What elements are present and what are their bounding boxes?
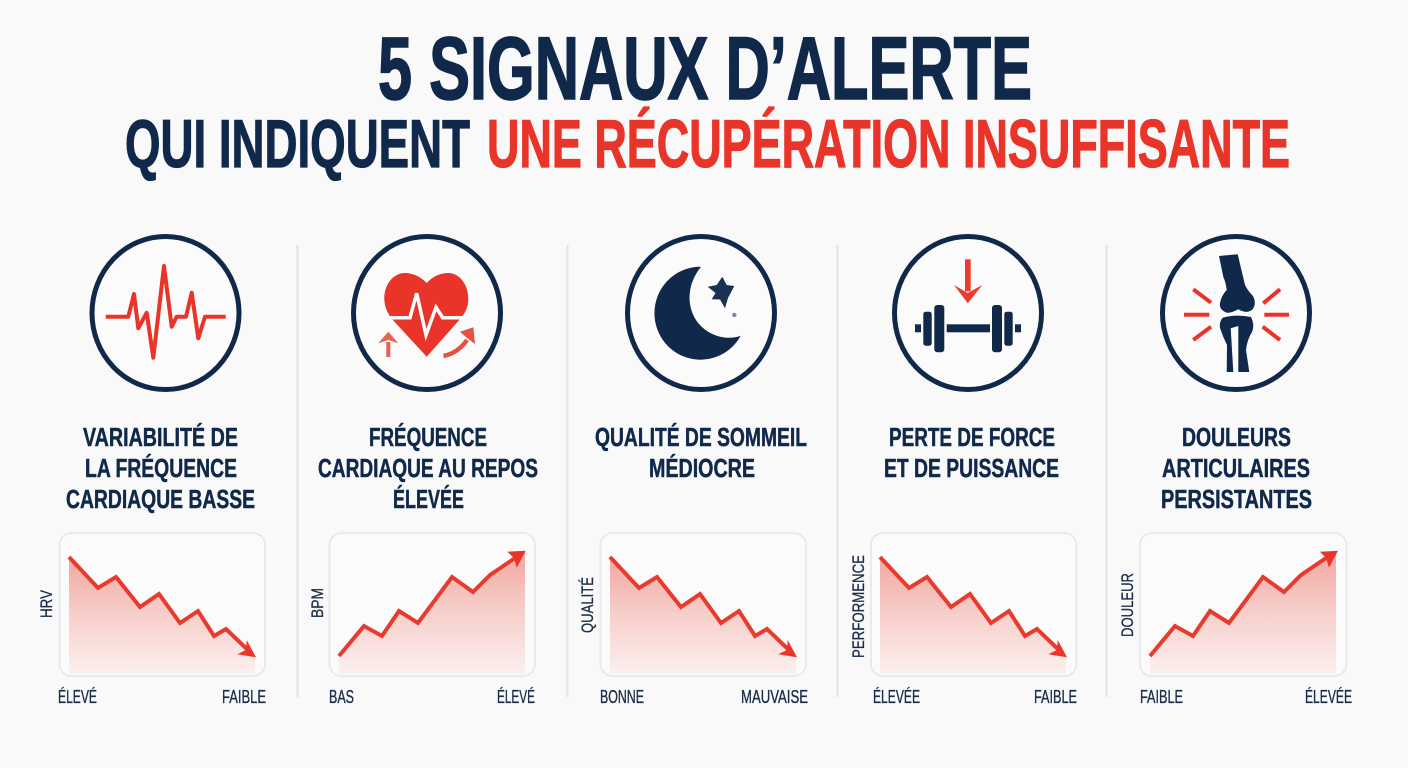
chart: HRV decline: ÉLEVÉ (58, 687, 97, 707)
chart: pain rise: ÉLEVÉE (1305, 687, 1352, 707)
chart: BPM rise: BPM (309, 588, 327, 618)
chart: performance decline: ÉLEVÉE (873, 687, 920, 707)
chart: sleep quality decline: QUALITÉ (578, 577, 597, 633)
chart: performance decline: FAIBLE (1034, 687, 1077, 707)
heading: fréquence: CARDIAQUE AU REPOS (318, 453, 538, 483)
panel: qualité de sommeil (578, 236, 808, 707)
heading: fréquence: ÉLEVÉE (393, 484, 464, 514)
heading: variabilité (66, 422, 255, 514)
chart: BPM rise: BAS (329, 687, 354, 707)
chart: pain rise: FAIBLE (1140, 687, 1183, 707)
heading: variabilité: CARDIAQUE BASSE (66, 484, 255, 514)
icon: heart with rising arrows (354, 236, 500, 390)
heading: fréquence: FRÉQUENCE (369, 422, 487, 452)
chart: sleep quality decline (578, 533, 808, 707)
chart: pain rise: DOULEUR (1119, 573, 1137, 637)
heading: perte de force: PERTE DE FORCE (889, 422, 1055, 452)
chart: BPM rise: ÉLEVÉ (497, 687, 535, 707)
chart: sleep quality decline: MAUVAISE (741, 687, 808, 707)
chart: performance decline: PERFORMENCE (850, 555, 868, 658)
icon: ECG trace in circle (92, 236, 239, 390)
heading: perte de force (884, 422, 1059, 483)
heading: douleurs: PERSISTANTES (1161, 484, 1312, 514)
heading: qualité (595, 422, 807, 483)
panel: fréquence cardiaque au repos (309, 236, 538, 707)
panel: douleurs articulaires (1119, 236, 1352, 707)
chart: HRV decline: FAIBLE (222, 687, 266, 707)
heading: douleurs (1161, 422, 1312, 514)
title (125, 18, 1290, 182)
chart: HRV decline (38, 533, 266, 707)
chart: performance decline (850, 533, 1077, 707)
panel: perte de force (850, 236, 1077, 707)
title: 5 SIGNAUX D’ALERTE (378, 18, 1032, 118)
chart: pain rise (1119, 533, 1352, 707)
icon: dumbbell with down arrow (894, 236, 1042, 390)
heading: douleurs: DOULEURS (1182, 422, 1291, 452)
icon: moon and star (628, 236, 774, 390)
chart: sleep quality decline: BONNE (600, 687, 644, 707)
heading: qualité: QUALITÉ DE SOMMEIL (595, 422, 807, 452)
title: QUI INDIQUENT (125, 106, 470, 182)
heading: perte de force: ET DE PUISSANCE (884, 453, 1059, 483)
chart: HRV decline: HRV (38, 590, 56, 618)
chart: BPM rise (309, 533, 535, 707)
heading: fréquence (318, 422, 538, 514)
heading: qualité: MÉDIOCRE (649, 453, 755, 483)
heading: variabilité: LA FRÉQUENCE (85, 453, 237, 483)
icon: knee joint with pain rays (1162, 236, 1310, 390)
panel: variabilité de la fréquence cardiaque (38, 236, 266, 707)
heading: variabilité: VARIABILITÉ DE (83, 422, 238, 452)
heading: douleurs: ARTICULAIRES (1162, 453, 1310, 483)
